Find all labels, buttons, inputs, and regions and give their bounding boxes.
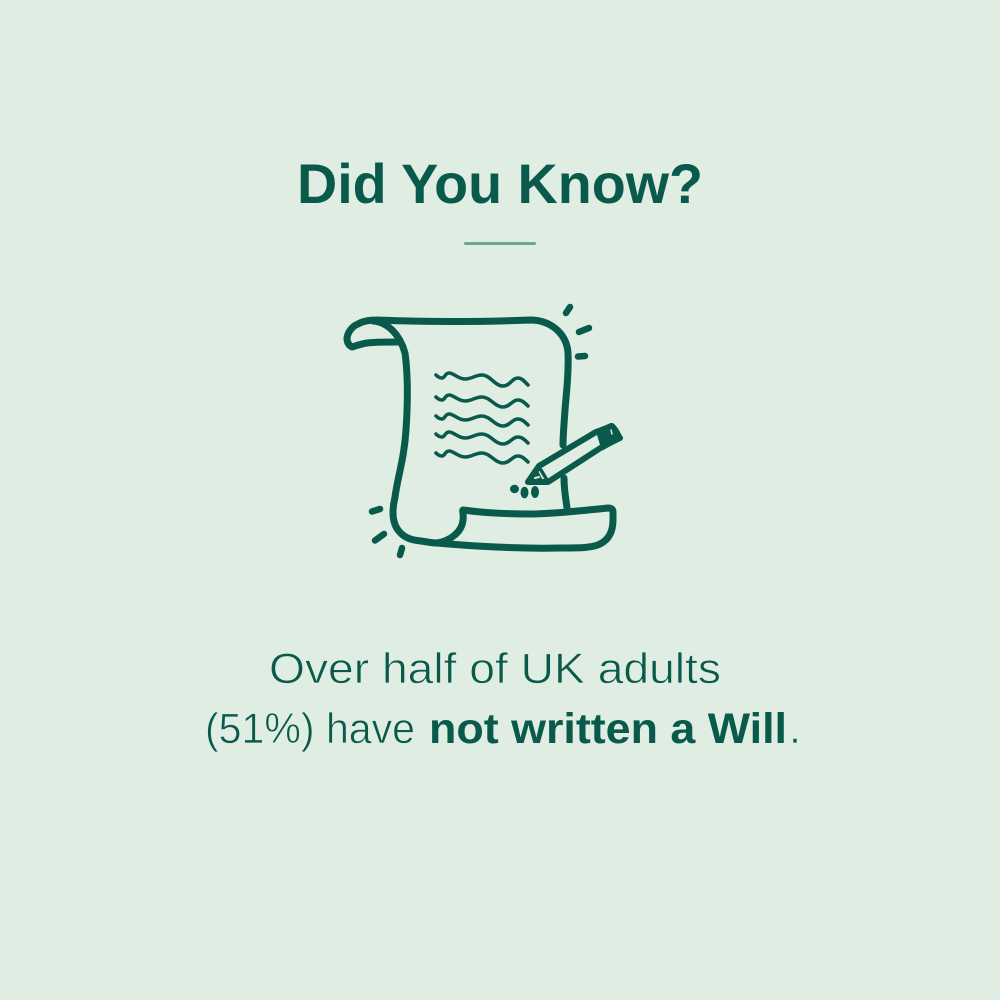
line 2 period: . bbox=[789, 705, 801, 753]
text lines bbox=[436, 373, 528, 463]
sparks top right bbox=[566, 307, 589, 356]
title underline bbox=[464, 242, 536, 245]
line 2 bold: not written a Will bbox=[429, 705, 787, 753]
body text bbox=[205, 645, 801, 753]
line 1: Over half of UK adults bbox=[269, 645, 721, 693]
scroll outline bbox=[347, 320, 613, 548]
line 2 regular: (51%) have bbox=[205, 705, 415, 753]
title: Did You Know? bbox=[297, 152, 703, 215]
ink dots bbox=[510, 485, 539, 498]
pencil bbox=[528, 425, 620, 482]
sparks bottom left bbox=[372, 509, 402, 555]
icon: scroll with pencil bbox=[347, 307, 620, 555]
